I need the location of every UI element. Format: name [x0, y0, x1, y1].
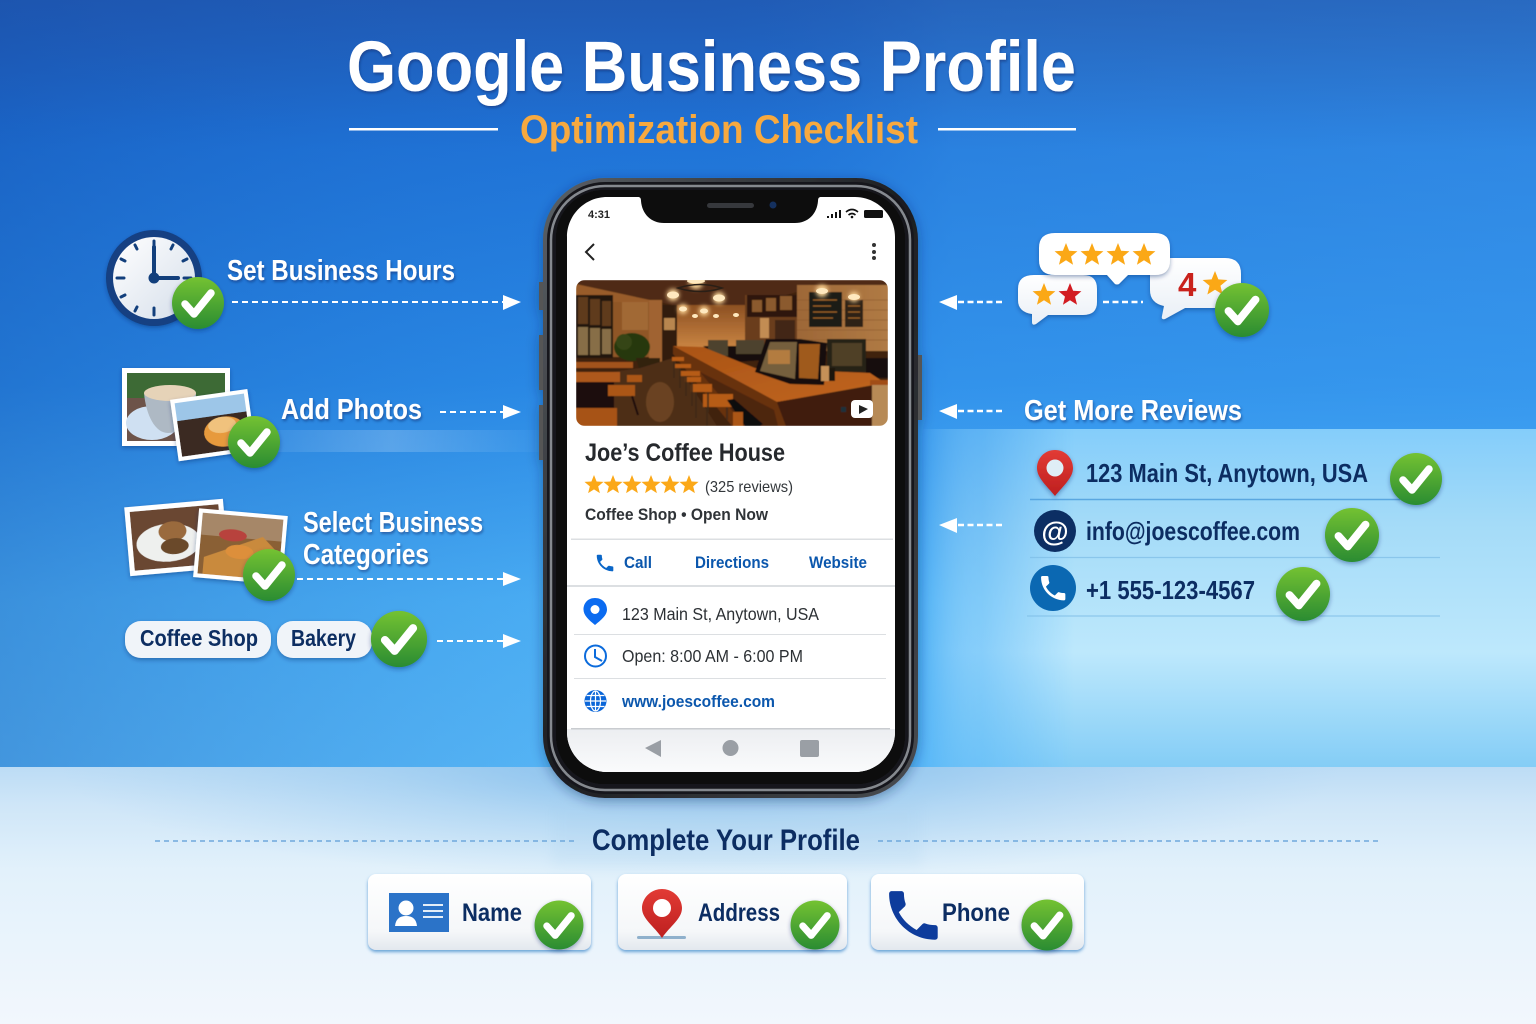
- check: [1390, 453, 1442, 505]
- icon: phone: [889, 891, 938, 940]
- pill: bakery: Bakery: [291, 625, 356, 651]
- detail: address: [584, 598, 819, 625]
- phone mockup: [539, 178, 922, 798]
- check: [1276, 567, 1330, 621]
- label: Set Business Hours: [227, 255, 455, 287]
- item: add photos: [122, 368, 521, 468]
- app bar: [586, 243, 876, 260]
- icon: review bubbles: [1018, 233, 1269, 337]
- check: [228, 416, 280, 468]
- action: call: [597, 554, 652, 572]
- check: [1022, 900, 1072, 950]
- action: directions: Directions: [695, 554, 769, 572]
- icon: red pin: [1037, 450, 1073, 496]
- action: website: Website: [809, 554, 867, 572]
- photo: coffee cup: [122, 368, 230, 446]
- notch details: [707, 202, 776, 208]
- item: select business categories: [124, 499, 521, 601]
- card: phone: [871, 874, 1084, 950]
- icon: at sign: @: [1041, 516, 1069, 547]
- card: address: Address: [698, 899, 780, 927]
- label: Categories: [303, 539, 429, 571]
- icon: id card: [389, 893, 449, 932]
- row: address: 123 Main St, Anytown, USA: [1086, 458, 1368, 488]
- title: Google Business Profile: [347, 28, 1076, 107]
- business name: Joe’s Coffee House: [585, 439, 785, 467]
- detail: address: 123 Main St, Anytown, USA: [622, 604, 819, 624]
- item: set business hours: [106, 230, 521, 329]
- review count: (325 reviews): [705, 479, 793, 496]
- contact list: [1027, 450, 1442, 621]
- bubble: top: [1039, 233, 1170, 284]
- review arrows: [939, 295, 1003, 533]
- arrow: [437, 634, 521, 648]
- item: category pills: [125, 611, 521, 667]
- pill: coffee shop: Coffee Shop: [140, 625, 258, 651]
- arrow: bottom: [939, 518, 1003, 533]
- check: [791, 901, 839, 949]
- pill: bakery: [277, 621, 372, 658]
- detail: website: [584, 690, 775, 712]
- photo: cafe interior: [576, 275, 888, 426]
- check: [1215, 283, 1269, 337]
- row: phone: [1027, 565, 1440, 621]
- row: email: [1030, 508, 1440, 562]
- icon: phone circle: [1030, 565, 1076, 611]
- section: complete your profile: [155, 824, 1380, 950]
- icon: at sign: [1034, 510, 1076, 552]
- heading: get more reviews: Get More Reviews: [1024, 395, 1242, 427]
- subtitle: Optimization Checklist: [520, 108, 918, 152]
- arrow: top: [939, 295, 1003, 310]
- action: call: Call: [624, 554, 652, 572]
- bubble: left: [1018, 275, 1097, 325]
- photo: food board: [193, 508, 288, 585]
- row: phone: +1 555-123-4567: [1086, 575, 1255, 605]
- card: phone: Phone: [942, 899, 1010, 927]
- detail: hours: Open: 8:00 AM - 6:00 PM: [622, 646, 803, 666]
- check: [172, 277, 224, 329]
- label: Add Photos: [281, 394, 422, 426]
- row: email: info@joescoffee.com: [1086, 516, 1300, 546]
- action row: [597, 554, 867, 572]
- detail: website: www.joescoffee.com: [621, 693, 775, 711]
- navigation bar: [567, 728, 895, 772]
- card: name: [368, 874, 591, 950]
- bubble: right: [1150, 258, 1241, 319]
- check: [1325, 508, 1379, 562]
- category and status: Coffee Shop • Open Now: [585, 506, 768, 524]
- rating stars: [584, 475, 699, 493]
- pill: coffee shop: [125, 621, 271, 658]
- status bar: [588, 209, 883, 221]
- card: name: Name: [462, 899, 522, 927]
- status bar: 4:31: [588, 209, 610, 221]
- label: [303, 507, 483, 571]
- arrow: [440, 405, 521, 419]
- card: address: [618, 874, 847, 950]
- arrow: middle: [939, 404, 1003, 419]
- title: [347, 28, 1076, 152]
- photo: plate: [124, 499, 229, 576]
- label: Select Business: [303, 507, 483, 539]
- arrow: [232, 295, 521, 310]
- check: [371, 611, 427, 667]
- check: [535, 901, 583, 949]
- screen: [567, 197, 895, 772]
- heading: Complete Your Profile: [592, 824, 860, 857]
- check: [243, 549, 295, 601]
- icon: pin: [637, 889, 686, 939]
- phone body: [539, 178, 922, 798]
- arrow: [297, 572, 521, 586]
- row: address: [1030, 450, 1442, 505]
- photo: pastry: [170, 389, 256, 461]
- icon: clock: [106, 230, 202, 326]
- bubble: right: 4: [1178, 266, 1197, 303]
